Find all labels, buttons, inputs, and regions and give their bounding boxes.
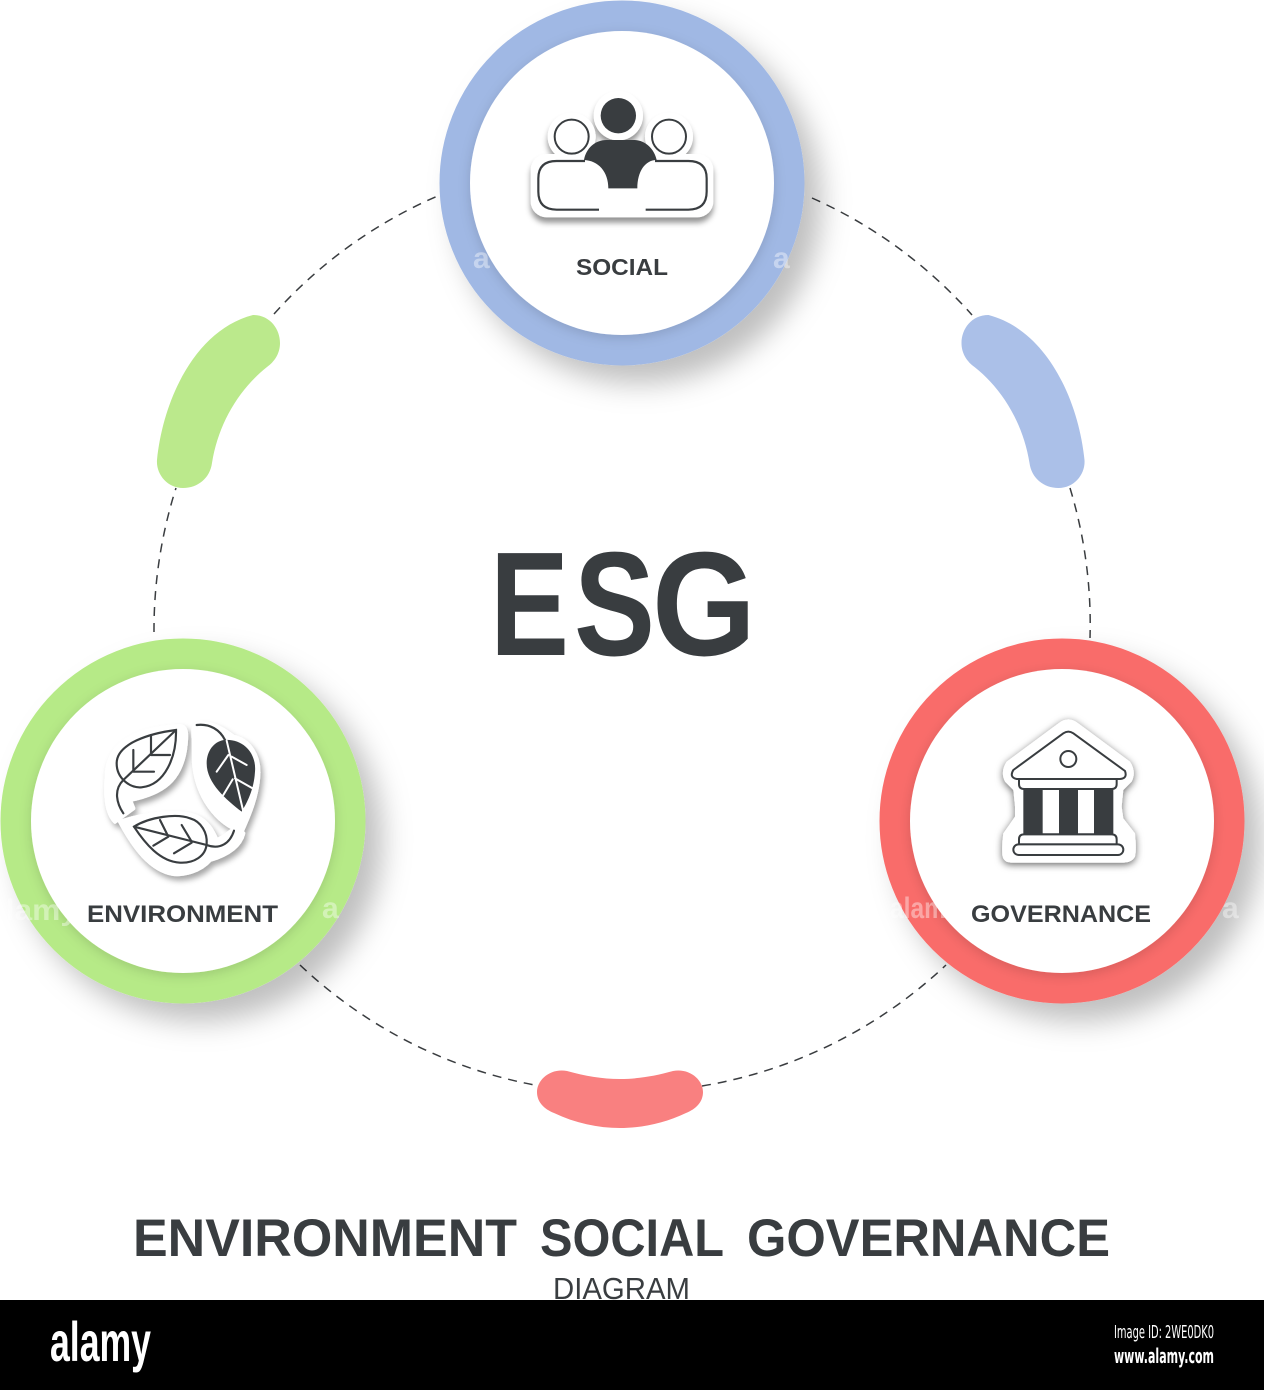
social ring [455, 16, 789, 350]
icon: people [531, 91, 713, 217]
social label: SOCIAL [576, 254, 668, 280]
social watermark: a [773, 242, 790, 275]
governance watermark [890, 892, 1239, 925]
subtitle: DIAGRAM [553, 1271, 690, 1306]
center heading: ESG: E [490, 522, 569, 687]
governance watermark: a [1222, 892, 1239, 925]
arc pill: blue [962, 315, 1085, 488]
environment ring [16, 654, 350, 988]
center heading: ESG [490, 522, 756, 687]
arc pill: green [157, 315, 280, 488]
icon: leaves [106, 723, 259, 874]
panel: environment [0, 654, 350, 988]
social watermark [473, 242, 790, 275]
governance watermark: alam [890, 892, 946, 925]
environment watermark: a [322, 892, 339, 925]
governance ring [895, 654, 1229, 988]
environment label: ENVIRONMENT [87, 901, 278, 928]
title [133, 1209, 1110, 1268]
icon: bank building [1002, 719, 1136, 863]
environment inner disc [31, 669, 335, 973]
arc pill: red [537, 1071, 703, 1128]
center heading: ESG: G [652, 522, 756, 687]
social inner disc [470, 31, 774, 335]
environment watermark [0, 892, 339, 927]
title: GOVERNANCE [747, 1209, 1110, 1268]
dashed connector ring [154, 195, 1090, 1086]
panel: social [455, 16, 790, 350]
panel: governance [890, 654, 1239, 988]
social watermark: a [473, 242, 490, 275]
footer bar [0, 1300, 1264, 1390]
center heading: ESG: S [574, 522, 655, 687]
alamy logo: alamy [50, 1310, 151, 1373]
title: SOCIAL [540, 1209, 724, 1268]
title: ENVIRONMENT [133, 1209, 517, 1268]
governance label: GOVERNANCE [971, 901, 1151, 928]
governance inner disc [910, 669, 1214, 973]
